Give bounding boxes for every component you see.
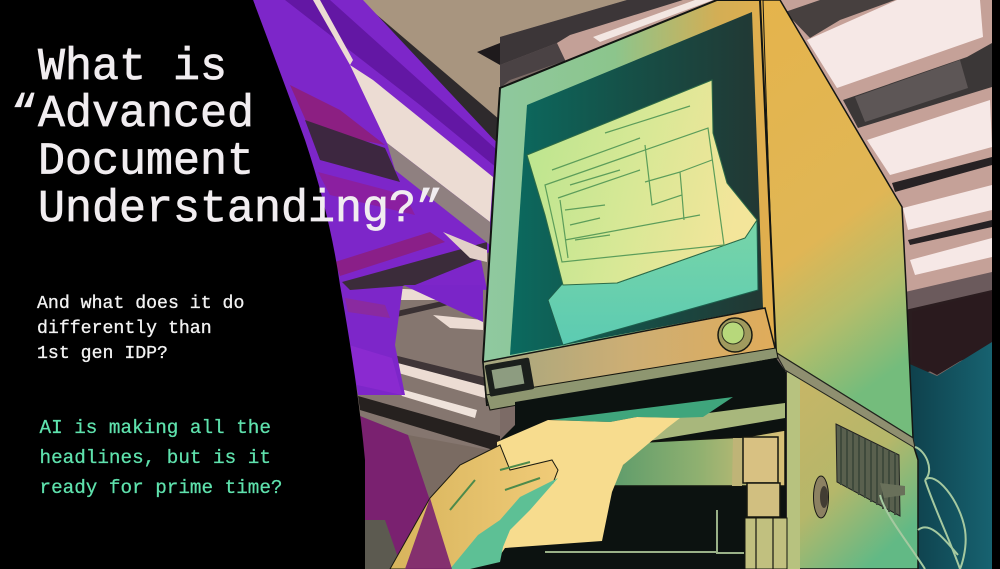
background: lower-left ceiling stripes xyxy=(340,230,500,569)
green callout text: headlines, but is it xyxy=(40,447,271,469)
cables xyxy=(880,447,966,569)
green callout text xyxy=(40,417,282,499)
title: Document xyxy=(38,136,254,188)
white light wedge xyxy=(350,65,493,222)
subtitle question xyxy=(37,294,244,364)
paper feeding out of the printer xyxy=(497,397,733,560)
hand holding the paper xyxy=(390,445,558,569)
subtitle question: 1st gen IDP? xyxy=(37,344,168,364)
printer xyxy=(470,358,787,569)
round dial xyxy=(718,318,752,352)
printer front panel xyxy=(612,430,785,486)
display slot xyxy=(485,357,534,397)
background: ceiling and wall xyxy=(255,0,1000,569)
ventilation grille xyxy=(836,424,900,516)
cabinet xyxy=(752,0,966,569)
monitor lower lip xyxy=(483,308,776,405)
green callout text: ready for prime time? xyxy=(40,477,282,499)
subtitle question: differently than xyxy=(37,319,212,339)
title: “Advanced xyxy=(11,89,254,140)
title: Understanding?” xyxy=(38,184,443,235)
title: What is xyxy=(38,42,227,93)
subtitle question: And what does it do xyxy=(37,294,244,314)
green callout text: AI is making all the xyxy=(40,417,271,439)
screen xyxy=(510,12,763,355)
monitor xyxy=(483,0,778,410)
black curved side panel xyxy=(0,0,365,569)
cabinet lock xyxy=(814,476,828,518)
lower cabinet body xyxy=(787,372,918,569)
purple diagonal light band xyxy=(253,0,497,569)
cabinet front strip xyxy=(752,0,776,355)
title xyxy=(11,42,443,235)
monitor bezel xyxy=(483,0,776,405)
scanned document xyxy=(527,80,758,345)
cabinet side panel xyxy=(762,0,913,438)
printer doors xyxy=(743,437,778,483)
